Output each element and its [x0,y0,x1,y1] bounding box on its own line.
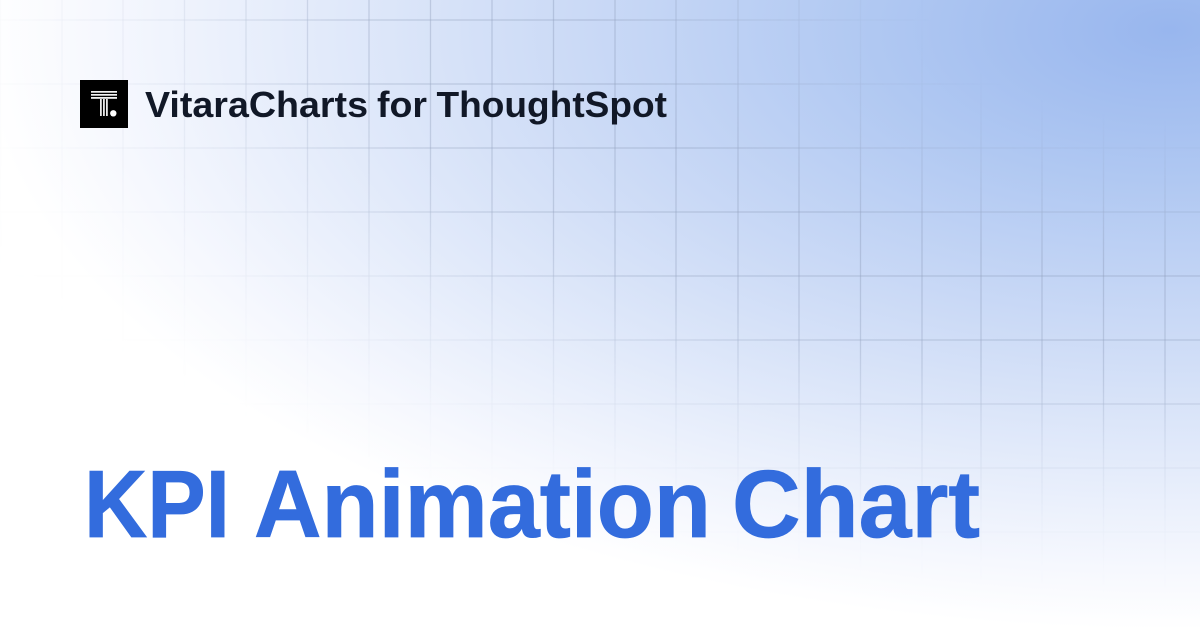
title: Animation [254,451,711,558]
brand name: VitaraCharts [145,84,368,125]
brand name: for [377,84,427,125]
icon: ThoughtSpot logo [80,80,128,128]
title [84,451,980,558]
background grid [62,0,1200,492]
brand name: ThoughtSpot [436,84,667,125]
brand name [145,84,667,125]
title: KPI [84,451,230,558]
title: Chart [732,451,980,558]
